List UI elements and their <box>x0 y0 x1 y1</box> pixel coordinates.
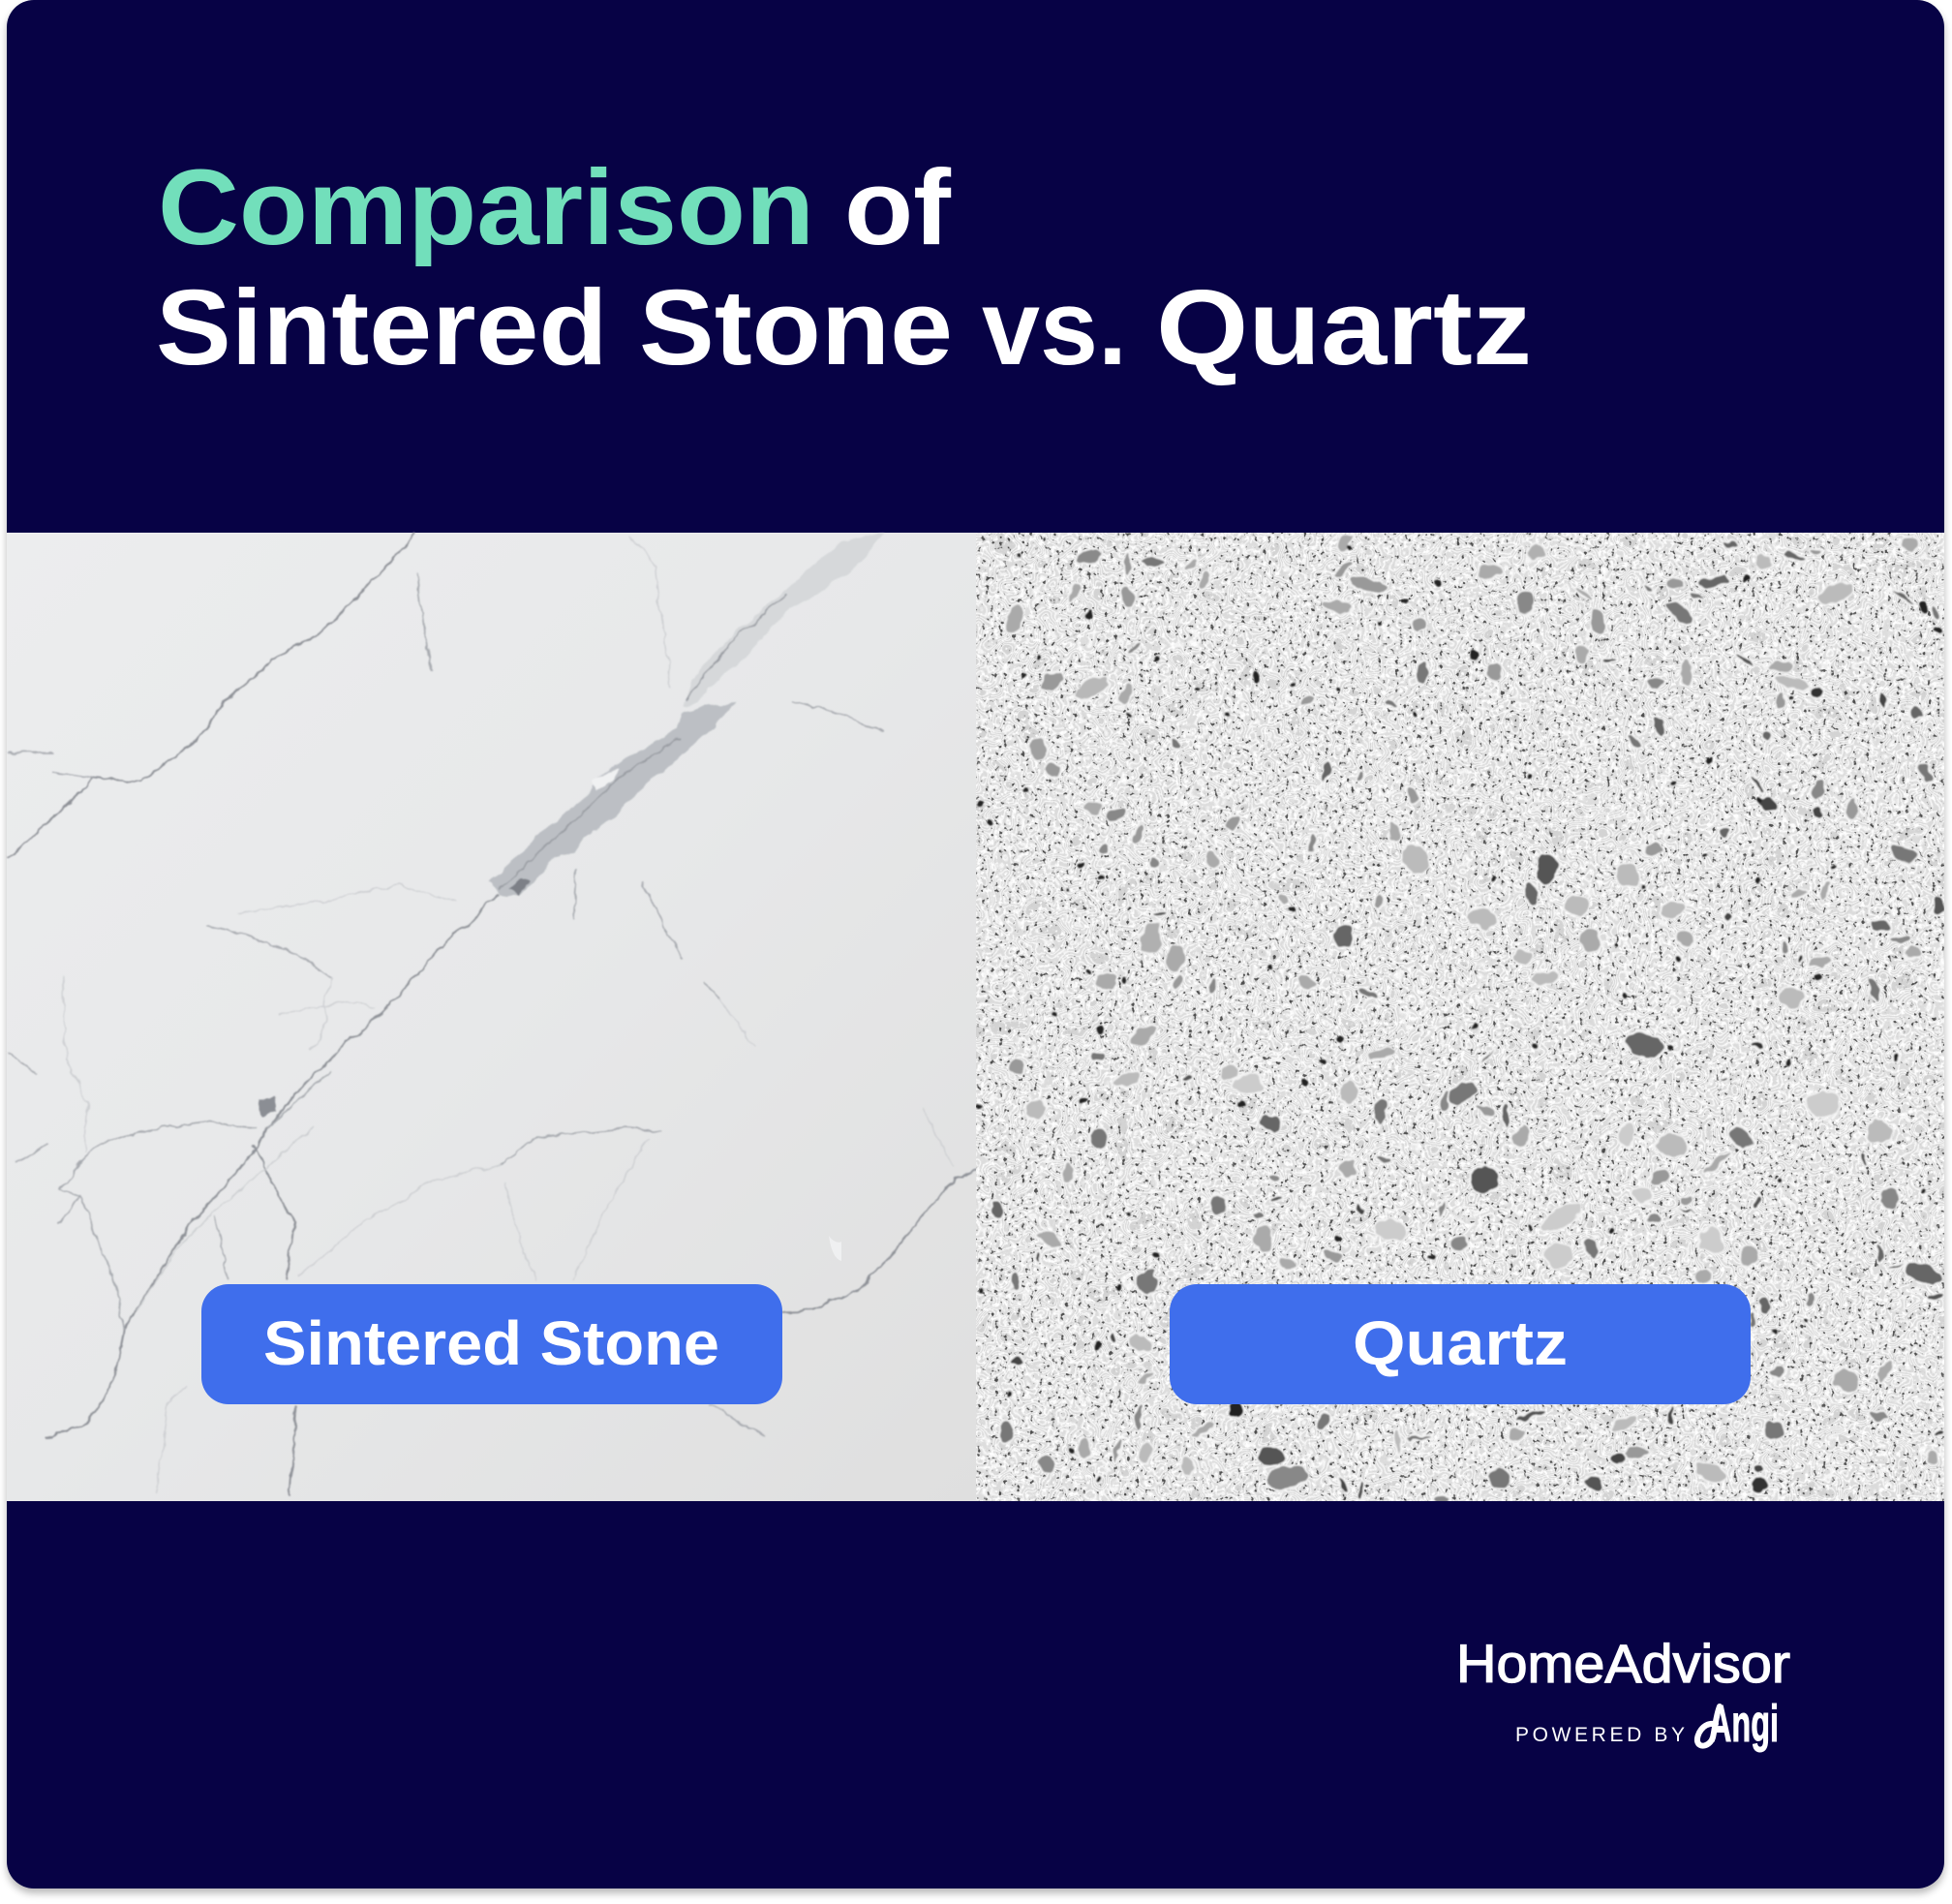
title: Comparison <box>158 148 814 267</box>
title: of <box>844 148 951 267</box>
icon: Angi swash <box>1697 1706 1720 1746</box>
title: Quartz <box>1156 268 1532 387</box>
panel: sintered stone marble <box>7 533 978 1501</box>
panel: quartz texture <box>976 529 1945 1504</box>
logo: HomeAdvisor powered by Angi: Angi <box>1709 1695 1779 1753</box>
label: quartz <box>1170 1284 1751 1404</box>
logo: HomeAdvisor powered by Angi <box>1456 1633 1790 1753</box>
label: sintered stone: Sintered Stone <box>263 1308 719 1378</box>
title: vs. <box>982 268 1127 387</box>
title <box>156 148 1532 387</box>
label: quartz: Quartz <box>1353 1308 1568 1378</box>
marble glare spot <box>829 1236 841 1261</box>
marble veins <box>10 533 978 1496</box>
title: Sintered Stone <box>156 268 953 387</box>
label: sintered stone <box>201 1284 782 1404</box>
logo: HomeAdvisor powered by Angi: POWERED BY <box>1515 1724 1685 1746</box>
quartz stones <box>977 529 1945 1504</box>
logo: HomeAdvisor powered by Angi: HomeAdvisor <box>1456 1633 1790 1694</box>
